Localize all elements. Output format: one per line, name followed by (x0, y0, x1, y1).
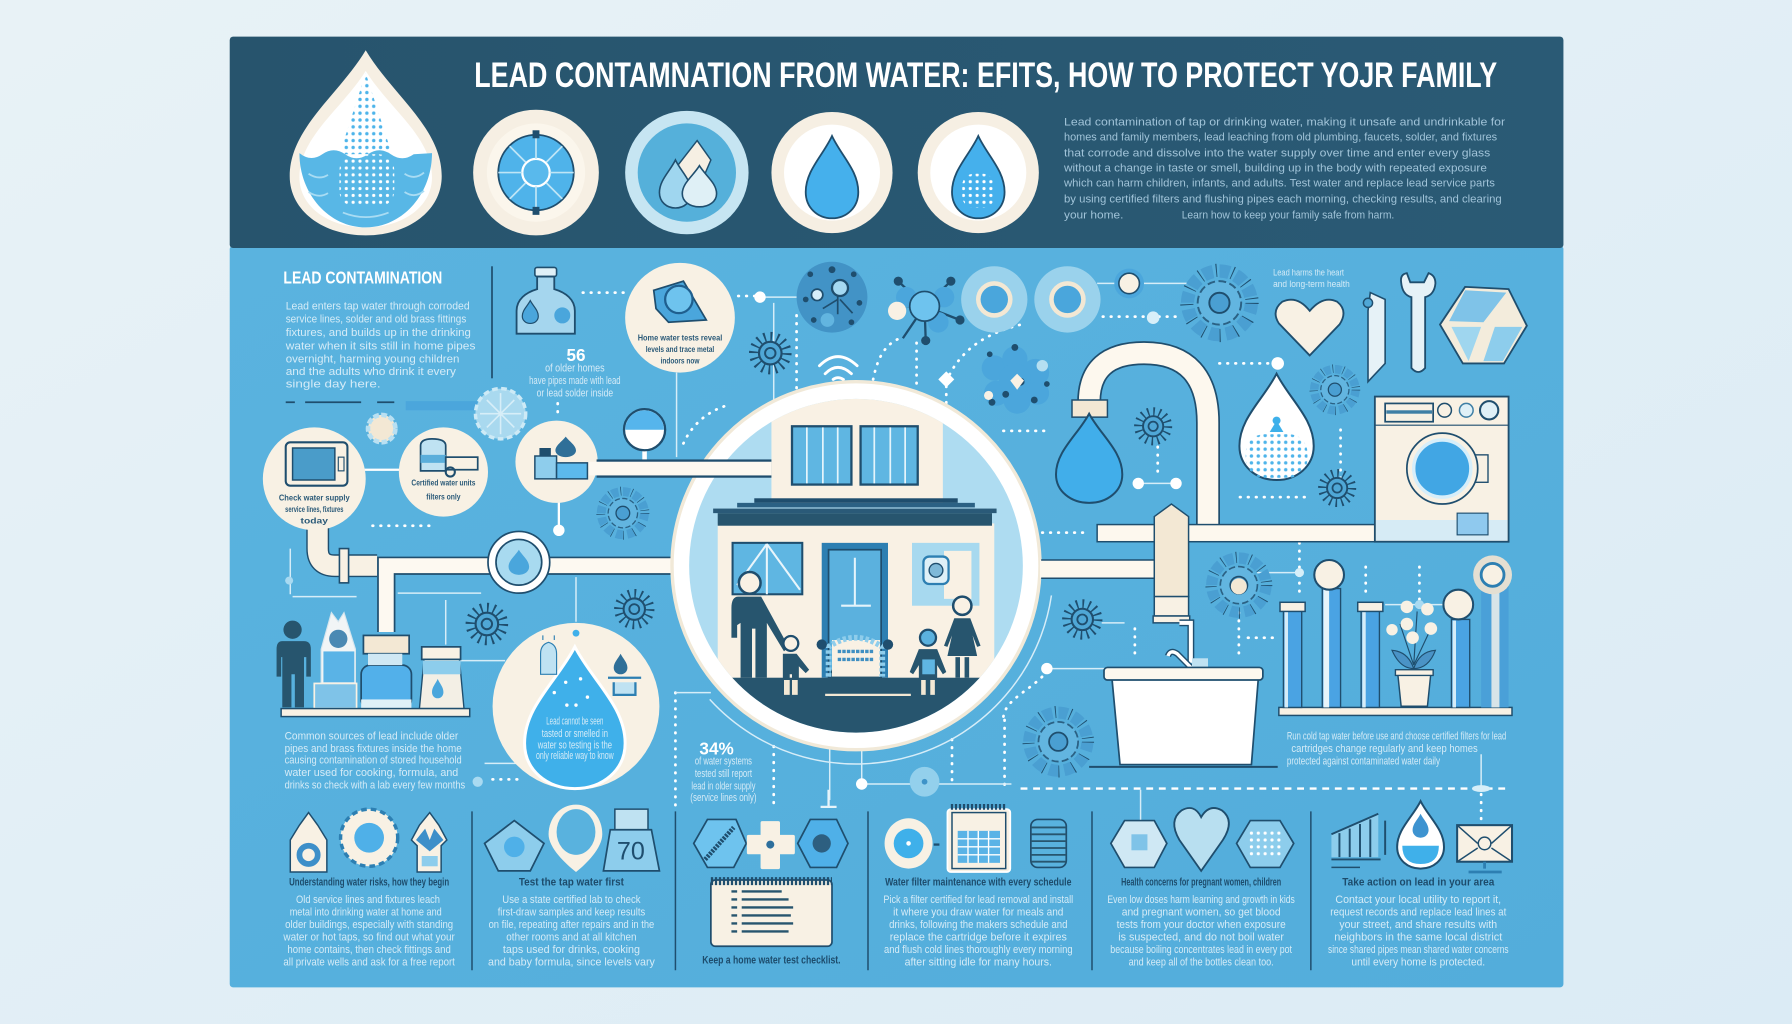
virus 12 (601, 491, 645, 535)
column: identify sources: older buildings, especially with standing (285, 919, 453, 931)
door wreath (817, 638, 893, 677)
icon: small bulb (1114, 269, 1144, 298)
sink basin (1089, 667, 1278, 767)
virus 6 (1314, 369, 1356, 411)
bubble: water testing kit: Home water tests reveal (638, 333, 722, 343)
bubble: tablet monitor (263, 427, 366, 530)
section heading: lead contamination: LEAD CONTAMINATION (283, 267, 442, 287)
figure: child left (783, 636, 809, 695)
column: health protection (1107, 808, 1295, 969)
title: LEAD CONTAMNATION FROM WATER: EFITS, HOW TO PROTECT YOJR FAMILY (474, 55, 1497, 95)
column: reporting and alerts: Contact your local utility to report it, (1335, 894, 1501, 906)
column: checklist: Keep a home water test checklist. (702, 954, 841, 966)
column 2 (1314, 560, 1344, 707)
icon: water bottle tank (517, 267, 575, 334)
bubble: tablet monitor: service lines, fixtures (285, 504, 344, 514)
house illustration (713, 399, 997, 733)
virus 11 (1029, 712, 1088, 771)
section dividers (472, 811, 1311, 970)
stat: 56: have pipes made with lead (529, 375, 621, 387)
stat: 34 percent (690, 738, 757, 804)
icons: chart, drop, monitor (1331, 801, 1512, 872)
column 3 (1358, 602, 1383, 707)
column 5 gauge (1473, 555, 1512, 707)
column: filter and schedule: after sitting idle for many hours. (905, 957, 1052, 969)
figure: woman (944, 597, 981, 678)
header description text: by using certified filters and flushing pipes each morning, checking results, and clearing (1064, 193, 1502, 205)
box (314, 683, 357, 709)
icon: broken heart (1276, 300, 1343, 355)
column: health protection: and keep all of the bottles clean too. (1129, 957, 1274, 969)
column: filter and schedule: drinks, following the makers schedule and (889, 919, 1067, 931)
bottle with face (321, 613, 355, 683)
text block: lead contamination intro (285, 301, 476, 390)
column: reporting and alerts: neighbors in the same local district (1334, 932, 1502, 944)
column: test and locate: Test the tap water first (519, 877, 624, 889)
header description text: Learn how to keep your family safe from harm. (1182, 209, 1394, 221)
icon: gauge ball (624, 409, 665, 462)
jar (361, 635, 411, 709)
household products group (277, 613, 470, 717)
stat: 34 percent: 34% (699, 738, 734, 758)
text block: lead contamination intro: single day here. (286, 378, 381, 390)
column: filter and schedule: and flush cold lines thoroughly every morning (884, 944, 1073, 956)
icon: washing machine (1375, 397, 1509, 542)
text block: lead contamination intro: Lead enters tap water through corroded (286, 301, 470, 313)
faucet with pipes (1040, 353, 1375, 767)
text block: household sources: water used for cooking, formula, and (284, 767, 458, 779)
text block: lead contamination intro: and the adults who drink it every (286, 366, 457, 378)
bubble: filter canister (399, 427, 488, 517)
callout: big circle with drop: only reliable way to know (536, 750, 614, 762)
stat: 34 percent: of water systems (695, 756, 752, 768)
column: filter and schedule: Pick a filter certified for lead removal and install (883, 894, 1073, 906)
bubble: filter canister: filters only (426, 491, 461, 501)
icon: dotted drop circle (918, 112, 1039, 233)
header description text: Lead contamination of tap or drinking water, making it unsafe and undrinkable for (1064, 117, 1505, 129)
bottle (419, 647, 464, 709)
icon: overlapping drops circle (625, 111, 749, 234)
valve on pipe (488, 531, 550, 593)
column: health protection: tests from your doctor when exposure (1117, 919, 1286, 931)
bubble: tablet monitor: today (301, 515, 328, 525)
virus icons (471, 262, 1356, 771)
column: test and locate: Use a state certified lab to check (502, 894, 641, 906)
column: identify sources: home contains, then check fittings and (287, 944, 451, 956)
column 1 (1280, 602, 1305, 707)
callout drop (525, 647, 625, 789)
icons: disc, calendar, filter (885, 807, 1066, 872)
column: health protection: because boiling concentrates lead in every pot (1110, 944, 1292, 956)
text block: filter columns caption: Run cold tap water before use and choose certified filters for lead (1287, 730, 1506, 742)
stat: 56: or lead solder inside (537, 388, 613, 400)
callout: big circle with drop: water so testing is the (537, 740, 612, 752)
header description text: your home. (1064, 209, 1123, 221)
icons: hexes and heart (1111, 808, 1294, 871)
column: identify sources: water or hot taps, so find out what your (283, 932, 455, 944)
column 4 (1443, 590, 1473, 707)
virus cluster 4 (982, 344, 1050, 414)
bubble: water testing kit: indoors now (661, 355, 700, 365)
column: identify sources: Old service lines and fixtures leach (296, 894, 440, 906)
pipe: upper feed to house (589, 459, 771, 478)
icon: blue drop circle (771, 112, 893, 233)
stat: 56 (529, 345, 621, 400)
label over heart (1273, 267, 1350, 289)
horizontal pipes (1040, 504, 1375, 623)
icon: filter valve circle (473, 110, 599, 235)
bubble: supplies (515, 421, 598, 503)
text block: household sources: Common sources of lead include older (285, 730, 459, 742)
column: health protection: Health concerns for pregnant women, children (1121, 877, 1281, 889)
text block: lead contamination intro: service lines, solder and old brass fittings (286, 313, 467, 325)
stat: 34 percent: lead in older supply (691, 781, 756, 793)
decorative flower: pale particle (475, 389, 526, 439)
stat: 34 percent: tested still report (695, 768, 752, 780)
header description text (1063, 117, 1505, 221)
text block: household sources: causing contamination of stored household (285, 754, 462, 766)
column: filter and schedule: it where you draw water for meals and (893, 906, 1063, 918)
large water drop (1056, 414, 1122, 503)
checklist card (711, 880, 832, 946)
pipes: left network (318, 526, 674, 632)
icon: wrench (1401, 273, 1435, 372)
ring (672, 382, 1040, 750)
column: filter and schedule: Water filter maintenance with every schedule (885, 877, 1071, 889)
light panel behind last column (1481, 583, 1509, 707)
label over heart: Lead harms the heart (1273, 267, 1344, 277)
column: health protection: and pregnant women, so get blood (1122, 906, 1281, 918)
text block: lead contamination intro: water when it sits still in home pipes (285, 341, 476, 353)
column: identify sources: Understanding water risks, how they begin (289, 877, 449, 889)
text block: household sources (284, 730, 466, 792)
figure: man (731, 572, 789, 678)
column: test and locate (485, 805, 659, 969)
icon: hexagonal crate (1440, 287, 1527, 363)
virus 3 (754, 337, 787, 369)
column: reporting and alerts: since shared pipes mean shared water concerns (1328, 944, 1509, 956)
bubble: tablet monitor: Check water supply (279, 493, 350, 503)
callout: big circle with drop: Lead cannot be seen (546, 716, 603, 728)
panel: header band (230, 37, 1563, 248)
text block: lead contamination intro: overnight, harming young children (286, 353, 459, 365)
virus particle 1 (797, 262, 867, 333)
column: reporting and alerts: request records and replace lead lines at (1330, 906, 1506, 918)
connector lines and dotted paths (285, 266, 1509, 829)
header description text: that corrode and dissolve into the water supply over time and enter every glass (1064, 148, 1491, 160)
virus 8 (1323, 473, 1352, 503)
column: reporting and alerts (1328, 801, 1512, 969)
column: reporting and alerts: your street, and share results with (1339, 919, 1497, 931)
column: identify sources: all private wells and ask for a free report (283, 957, 455, 969)
faucet arch (1089, 353, 1208, 528)
icons: recycle, pin, box (485, 805, 659, 872)
column: test and locate: taps used for drinks, cooking (503, 944, 640, 956)
icon: tool (1363, 293, 1385, 382)
filter columns on shelf (1279, 555, 1512, 715)
central house in magnifier circle (670, 380, 1042, 752)
virus 5 (1187, 270, 1252, 335)
icons: recycle, pin, box: 70 (617, 837, 645, 865)
virus 10 (1067, 604, 1098, 635)
column: test and locate: on file, repeating after repairs and in the (489, 919, 654, 931)
stat: 34 percent: (service lines only) (690, 792, 757, 804)
icon: paired sample circles (961, 266, 1101, 333)
icon: dotted drop (1239, 374, 1314, 480)
decorative flower: cream particle (368, 415, 395, 442)
column: filter and schedule: replace the cartridge before it expires (890, 932, 1067, 944)
callout: big circle with drop: tasted or smelled in (542, 728, 608, 740)
icon: wifi signal (819, 357, 857, 379)
column: filter and schedule (883, 807, 1073, 969)
text block: household sources: pipes and brass fixtures inside the home (285, 743, 462, 755)
column: identify sources (283, 809, 455, 969)
text block: household sources: drinks so check with a lab every few months (285, 780, 466, 792)
header description text: without a change in taste or smell, building up in the body with repeated exposure (1063, 162, 1487, 174)
text block: filter columns caption: protected against contaminated water daily (1287, 756, 1440, 768)
virus 7 (1139, 412, 1168, 441)
column: reporting and alerts: Take action on lead in your area (1342, 877, 1495, 889)
stat: 56: 56 (566, 345, 586, 365)
bubble: filter canister: Certified water units (411, 478, 476, 488)
callout: big circle with drop (493, 623, 659, 790)
text block: lead contamination intro: fixtures, and builds up in the drinking (286, 327, 471, 339)
icon: large water drop with lead particles (290, 50, 442, 235)
virus 9 (1211, 557, 1267, 613)
column: health protection: is suspected, and do not boil water (1118, 932, 1284, 944)
label over heart: and long-term health (1273, 279, 1350, 289)
column: checklist (694, 819, 848, 966)
figure: child right (910, 630, 946, 695)
column: health protection: Even low doses harm learning and growth in kids (1107, 894, 1295, 906)
virus molecule 2 (888, 277, 965, 345)
header description text: homes and family members, lead leaching from old plumbing, faucets, solder, and fixtures (1064, 132, 1497, 144)
icons: hexes and cross (694, 819, 848, 867)
shelf (281, 709, 470, 717)
header description text: which can harm children, infants, and adults. Test water and replace lead service parts (1063, 177, 1495, 189)
text block: filter columns caption (1287, 730, 1506, 768)
column: identify sources: metal into drinking water at home and (290, 906, 442, 918)
panel: body infographic (262, 262, 1528, 970)
sink tap (1168, 623, 1208, 669)
column: test and locate: first-draw samples and keep results (498, 906, 646, 918)
virus 14 (619, 594, 650, 625)
column: test and locate: and baby formula, since levels vary (488, 957, 655, 969)
column: reporting and alerts: until every home is protected. (1351, 957, 1485, 969)
figure: person (277, 621, 311, 707)
icons: tags and gear (290, 809, 447, 872)
bubble: water testing kit: levels and trace metal (646, 344, 714, 354)
virus 13 (471, 608, 503, 640)
column: test and locate: other rooms and at all kitchen (506, 932, 637, 944)
potted plant (1386, 601, 1437, 706)
stat: 56: of older homes (545, 362, 605, 374)
bubble: water testing kit (625, 263, 735, 373)
panel: main blue body (230, 246, 1563, 987)
text block: filter columns caption: cartridges change regularly and keep homes (1291, 743, 1478, 755)
